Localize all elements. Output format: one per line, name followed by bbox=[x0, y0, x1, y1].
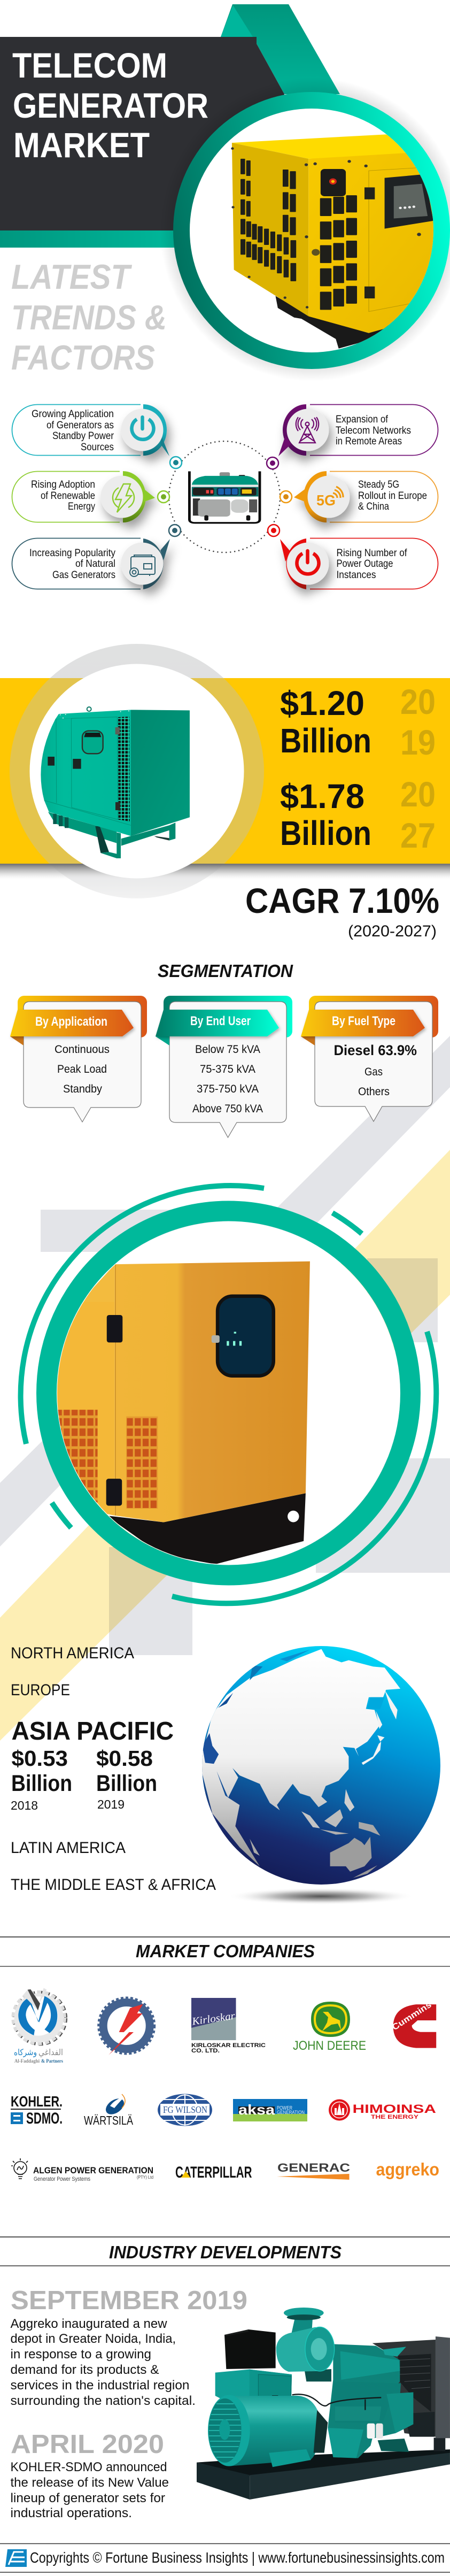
logo: Caterpillar: CATERPILLAR bbox=[175, 2164, 252, 2181]
asia pacific values: $0.58 bbox=[96, 1746, 153, 1771]
text: 5G rollout: Steady 5G bbox=[358, 479, 399, 490]
ribbon bbox=[301, 1010, 425, 1045]
logo: Algen Power Generation: Generator Power Systems bbox=[34, 2176, 90, 2182]
latest trends and factors heading bbox=[11, 257, 167, 377]
logo: Ultimate Power Solution: SOLUTION bbox=[102, 2057, 112, 2085]
logo: Al-Faddaghi and Partners bbox=[13, 1988, 66, 2064]
logo: Generac: GENERAC bbox=[277, 2161, 350, 2174]
icon: generator outline bbox=[130, 555, 155, 576]
title: TELECOM bbox=[12, 45, 167, 85]
icon: 5G signal bbox=[316, 487, 343, 509]
list items bbox=[192, 1043, 263, 1115]
text: natural gas bbox=[29, 548, 115, 581]
logo: Wartsila bbox=[84, 2094, 134, 2127]
logo: Generac bbox=[277, 2161, 350, 2180]
logo: Himoinsa: HIMOINSA bbox=[353, 2102, 436, 2116]
market value 2019: $1.20 bbox=[280, 684, 364, 722]
asia pacific values: Billion bbox=[96, 1771, 157, 1796]
list items: Peak Load bbox=[57, 1063, 107, 1075]
industry developments heading: INDUSTRY DEVELOPMENTS bbox=[109, 2242, 342, 2262]
ribbon: By Application bbox=[35, 1014, 107, 1029]
development: september 2019: Aggreko inaugurated a new bbox=[11, 2317, 167, 2331]
market value 2019 bbox=[280, 682, 436, 762]
latest trends and factors heading: LATEST bbox=[11, 257, 133, 296]
list items: Others bbox=[358, 1086, 390, 1098]
node marker bbox=[280, 491, 292, 503]
list items: Continuous bbox=[55, 1043, 110, 1056]
market value 2019: Billion bbox=[280, 721, 371, 760]
icon: telecom tower bbox=[296, 417, 319, 443]
icon: lightning bolt bbox=[113, 484, 134, 512]
asia pacific values: Billion bbox=[11, 1771, 72, 1796]
logo: Kirloskar Electric: Kirloskar bbox=[191, 2010, 236, 2028]
development: april 2020 bbox=[11, 2430, 169, 2520]
red crescent and pointer bbox=[280, 539, 329, 589]
market size circle with teal generator bbox=[10, 664, 264, 878]
latest trends and factors heading: TRENDS & bbox=[11, 298, 167, 337]
text: standby power: of Generators as bbox=[46, 420, 114, 431]
trend: renewable energy bbox=[12, 471, 169, 522]
logo: Cummins bbox=[391, 2000, 436, 2048]
logo: Al-Faddaghi and Partners: الفداغي bbox=[38, 2047, 63, 2058]
segment card: by application bbox=[10, 996, 147, 1122]
CAGR bbox=[245, 881, 439, 940]
text: power outage: Rising Number of bbox=[337, 548, 407, 559]
development: april 2020: lineup of generator sets for bbox=[11, 2491, 165, 2505]
text: telecom networks: in Remote Areas bbox=[336, 436, 402, 447]
text: 5G rollout: & China bbox=[358, 501, 389, 512]
segmentation heading: SEGMENTATION bbox=[158, 961, 293, 981]
icon: 5G signal: 5G bbox=[316, 492, 336, 509]
logo: John Deere bbox=[293, 2002, 366, 2053]
text: natural gas: Gas Generators bbox=[52, 570, 115, 581]
regional list: EUROPE bbox=[11, 1681, 70, 1699]
list items: Below 75 kVA bbox=[195, 1043, 260, 1056]
development: september 2019: surrounding the nation's capital. bbox=[11, 2394, 196, 2408]
market value 2027: $1.78 bbox=[280, 777, 364, 816]
text: power outage: Instances bbox=[337, 570, 376, 581]
text: natural gas: of Natural bbox=[75, 558, 115, 570]
large circle with orange generator bbox=[21, 1186, 436, 1603]
development: september 2019: SEPTEMBER 2019 bbox=[11, 2286, 247, 2315]
asia pacific values: $0.53 bbox=[12, 1746, 68, 1771]
teal crescent and pointer bbox=[121, 404, 169, 456]
CAGR: (2020-2027) bbox=[348, 922, 437, 940]
logo: Ultimate Power Solution bbox=[97, 1997, 156, 2055]
text: renewable energy: Energy bbox=[68, 501, 95, 512]
logo: FG Wilson: FG WILSON bbox=[163, 2104, 207, 2115]
orange crescent and pointer bbox=[294, 471, 350, 522]
regional list bbox=[11, 1644, 216, 1894]
market value 2027: 27 bbox=[400, 816, 436, 855]
header ring shadow bbox=[160, 78, 450, 381]
text: telecom networks: Expansion of bbox=[336, 414, 389, 425]
purple crescent and pointer bbox=[278, 404, 329, 456]
logo: Himoinsa bbox=[329, 2100, 436, 2121]
globe bbox=[199, 1646, 440, 1885]
diagonal background stripes bbox=[0, 1036, 450, 1741]
green crescent and pointer bbox=[100, 471, 155, 522]
text: power outage bbox=[337, 548, 407, 581]
market size yellow band bbox=[0, 678, 450, 864]
development: april 2020: industrial operations. bbox=[11, 2506, 132, 2520]
logo: Kirloskar Electric: KIRLOSKAR ELECTRIC bbox=[191, 2042, 266, 2049]
text: power outage: Power Outage bbox=[337, 558, 393, 570]
market size ring top bbox=[10, 644, 264, 898]
logo: Algen Power Generation: (PTY) Ltd bbox=[137, 2175, 153, 2180]
list items bbox=[333, 1042, 417, 1098]
regional list: THE MIDDLE EAST & AFRICA bbox=[11, 1876, 216, 1894]
text: renewable energy: Rising Adoption bbox=[31, 479, 95, 490]
title: GENERATOR bbox=[13, 86, 208, 125]
text: standby power bbox=[32, 409, 114, 453]
node marker bbox=[267, 457, 278, 469]
title bbox=[12, 45, 208, 165]
list items: Gas bbox=[364, 1066, 383, 1078]
teal ring bbox=[46, 1211, 410, 1575]
segment card: by end user bbox=[156, 996, 292, 1137]
header circle with yellow generator bbox=[173, 92, 450, 369]
logo: Himoinsa: THE ENERGY bbox=[371, 2114, 419, 2120]
large diesel generator set bbox=[197, 2308, 450, 2500]
text: 5G rollout: Rollout in Europe bbox=[358, 490, 427, 502]
development: september 2019 bbox=[11, 2286, 247, 2408]
text: telecom networks: Telecom Networks bbox=[336, 425, 411, 436]
development: september 2019: in response to a growing bbox=[11, 2347, 151, 2362]
logo: John Deere: JOHN DEERE bbox=[293, 2039, 366, 2053]
logo: Aksa: POWER bbox=[277, 2105, 292, 2111]
logo: Kirloskar Electric bbox=[191, 1998, 266, 2054]
logo: Kohler SDMO: SDMO. bbox=[26, 2110, 63, 2127]
text: standby power: Growing Application bbox=[32, 409, 114, 420]
icon: power button bbox=[297, 551, 319, 574]
regional list: NORTH AMERICA bbox=[11, 1644, 134, 1662]
band shadow bbox=[0, 864, 450, 881]
logo: Caterpillar bbox=[175, 2164, 252, 2181]
development: april 2020: KOHLER-SDMO announced bbox=[11, 2460, 167, 2474]
market value 2027: Billion bbox=[280, 814, 371, 852]
text: 5G rollout bbox=[358, 479, 427, 512]
logo: Aksa: GENERATION bbox=[277, 2110, 305, 2115]
ribbon: By Fuel Type bbox=[332, 1014, 395, 1028]
development: april 2020: the release of its New Value bbox=[11, 2475, 169, 2490]
logo: Al-Faddaghi and Partners: Al-Faddaghi bbox=[14, 2058, 40, 2064]
icon: power button bbox=[131, 417, 153, 440]
logo: FG Wilson bbox=[158, 2094, 212, 2126]
logo: Aksa bbox=[233, 2099, 307, 2121]
text: renewable energy: of Renewable bbox=[41, 490, 95, 502]
logo: Kirloskar Electric: CO. LTD. bbox=[191, 2048, 220, 2054]
ribbon: By End User bbox=[190, 1014, 251, 1028]
trend: 5G rollout bbox=[280, 471, 438, 522]
logo: Wartsila: WÄRTSILÄ bbox=[84, 2113, 134, 2127]
market value 2027 bbox=[280, 774, 436, 855]
globe shadow bbox=[228, 1888, 415, 1905]
market value 2019: 20 bbox=[400, 682, 436, 721]
market companies heading: MARKET COMPANIES bbox=[136, 1941, 315, 1961]
text: natural gas: Increasing Popularity bbox=[29, 548, 115, 559]
logo: Cummins: Cummins bbox=[391, 2000, 433, 2032]
asia pacific values: 2018 bbox=[11, 1798, 38, 1812]
regional list: LATIN AMERICA bbox=[11, 1839, 126, 1857]
list items: Above 750 kVA bbox=[192, 1103, 263, 1115]
central portable generator bbox=[189, 471, 260, 523]
market value 2019: 19 bbox=[400, 722, 436, 762]
list items: 375-750 kVA bbox=[197, 1083, 259, 1095]
logo: Al-Faddaghi and Partners: وشركاه bbox=[14, 2047, 37, 2058]
text: renewable energy bbox=[31, 479, 95, 512]
trend connector dotted circle bbox=[169, 441, 280, 552]
trend: telecom networks bbox=[267, 404, 438, 469]
asia pacific values bbox=[11, 1717, 174, 1812]
node marker bbox=[268, 525, 280, 536]
logo: Ultimate Power Solution: ULTIMATE bbox=[141, 2057, 152, 2085]
outer arc segments bbox=[21, 1186, 436, 1603]
list items bbox=[55, 1043, 110, 1095]
logo: Aksa: aksa bbox=[238, 2102, 275, 2118]
logo: Aggreko: aggreko bbox=[376, 2159, 439, 2179]
list items: 75-375 kVA bbox=[200, 1063, 255, 1075]
navy crescent and pointer bbox=[121, 539, 170, 589]
ribbon bbox=[10, 1010, 134, 1045]
list items: Standby bbox=[63, 1083, 102, 1095]
logo: Kohler SDMO bbox=[11, 2093, 63, 2127]
footer logo bbox=[5, 2549, 27, 2567]
title: MARKET bbox=[13, 125, 150, 165]
market value 2027: 20 bbox=[400, 774, 436, 814]
logo: Al-Faddaghi and Partners: & Partners bbox=[41, 2058, 63, 2064]
node marker bbox=[158, 491, 169, 503]
logo: Kohler SDMO: KOHLER. bbox=[11, 2093, 63, 2110]
development: september 2019: demand for its products & bbox=[11, 2363, 159, 2377]
development: september 2019: services in the industrial region bbox=[11, 2378, 189, 2393]
node marker bbox=[170, 457, 182, 468]
development: april 2020: APRIL 2020 bbox=[11, 2430, 164, 2459]
asia pacific values: ASIA PACIFIC bbox=[12, 1717, 174, 1745]
logo: Algen Power Generation: ALGEN POWER GENERATION bbox=[33, 2165, 153, 2175]
segment card: by fuel type bbox=[301, 996, 438, 1121]
latest trends and factors heading: FACTORS bbox=[11, 338, 155, 377]
trend: standby power sources bbox=[12, 404, 182, 468]
development: september 2019: depot in Greater Noida, India, bbox=[11, 2332, 176, 2346]
asia pacific values: 2019 bbox=[97, 1797, 125, 1811]
trend: power outage bbox=[268, 525, 438, 589]
node marker bbox=[169, 525, 181, 536]
trend: natural gas generators bbox=[12, 525, 181, 589]
text: standby power: Standby Power bbox=[52, 430, 114, 442]
text: telecom networks bbox=[336, 414, 411, 447]
ribbon bbox=[156, 1010, 279, 1045]
logo: Algen Power Generation bbox=[11, 2158, 153, 2182]
text: standby power: Sources bbox=[81, 442, 114, 453]
header ribbon bbox=[0, 4, 340, 248]
footer bbox=[0, 2543, 450, 2572]
list items: Diesel 63.9% bbox=[333, 1042, 417, 1058]
logo: Ultimate Power Solution: POWER bbox=[114, 2084, 136, 2093]
